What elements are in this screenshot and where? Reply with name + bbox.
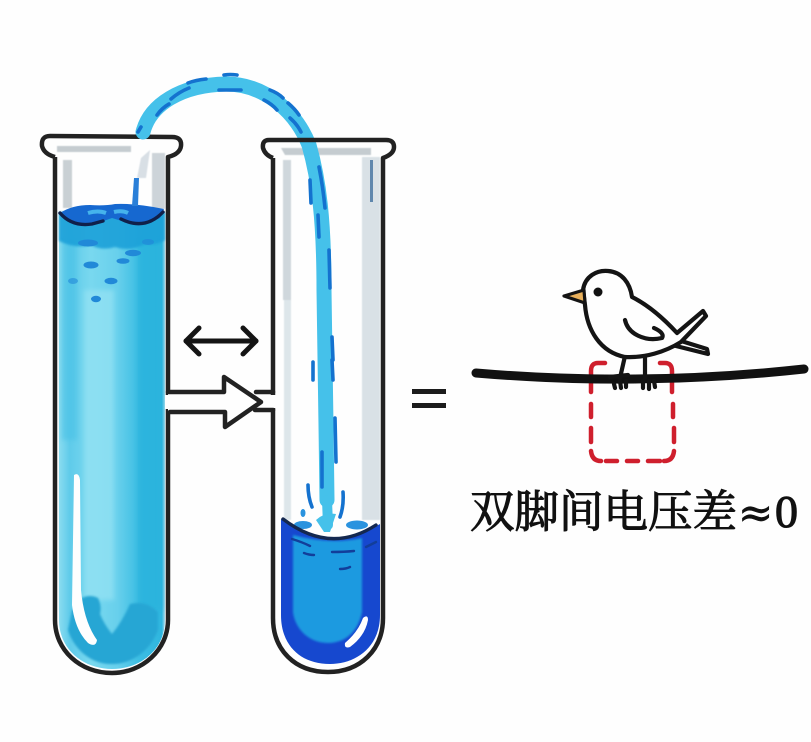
caption: ≈ (738, 488, 773, 537)
double-headed arrow (186, 328, 256, 354)
bird eye (594, 288, 602, 296)
dashes in water (68, 239, 154, 302)
caption: 双脚间电压差 (470, 487, 737, 537)
wire (476, 369, 804, 379)
dashed red box (591, 363, 674, 461)
right test tube (138, 74, 394, 672)
water body right (281, 519, 380, 664)
outline left (42, 136, 181, 673)
darker bands (62, 240, 162, 610)
meniscus (60, 212, 163, 225)
bird beak (564, 290, 585, 303)
outline right (263, 140, 394, 672)
stream dashes (138, 74, 343, 517)
surface lines (292, 539, 376, 569)
deep band under surface (59, 212, 165, 249)
bird tail (676, 340, 708, 354)
glass shading (57, 146, 165, 620)
equals sign (412, 389, 446, 408)
highlight (72, 474, 97, 645)
connecting channel arrow (165, 377, 277, 427)
bird wing (625, 320, 663, 339)
water stream (143, 84, 328, 525)
bottom highlight (345, 616, 368, 648)
pour stream tail (132, 178, 139, 206)
splash (294, 509, 368, 530)
caption: 0 (775, 486, 798, 537)
surface (60, 204, 164, 224)
water body left (59, 212, 165, 669)
bird body (583, 271, 706, 357)
left test tube (42, 136, 181, 673)
meniscus (283, 519, 376, 539)
bottom sediment (68, 596, 158, 664)
bird (564, 271, 708, 389)
glass shading (281, 148, 380, 520)
bird legs (610, 356, 655, 389)
